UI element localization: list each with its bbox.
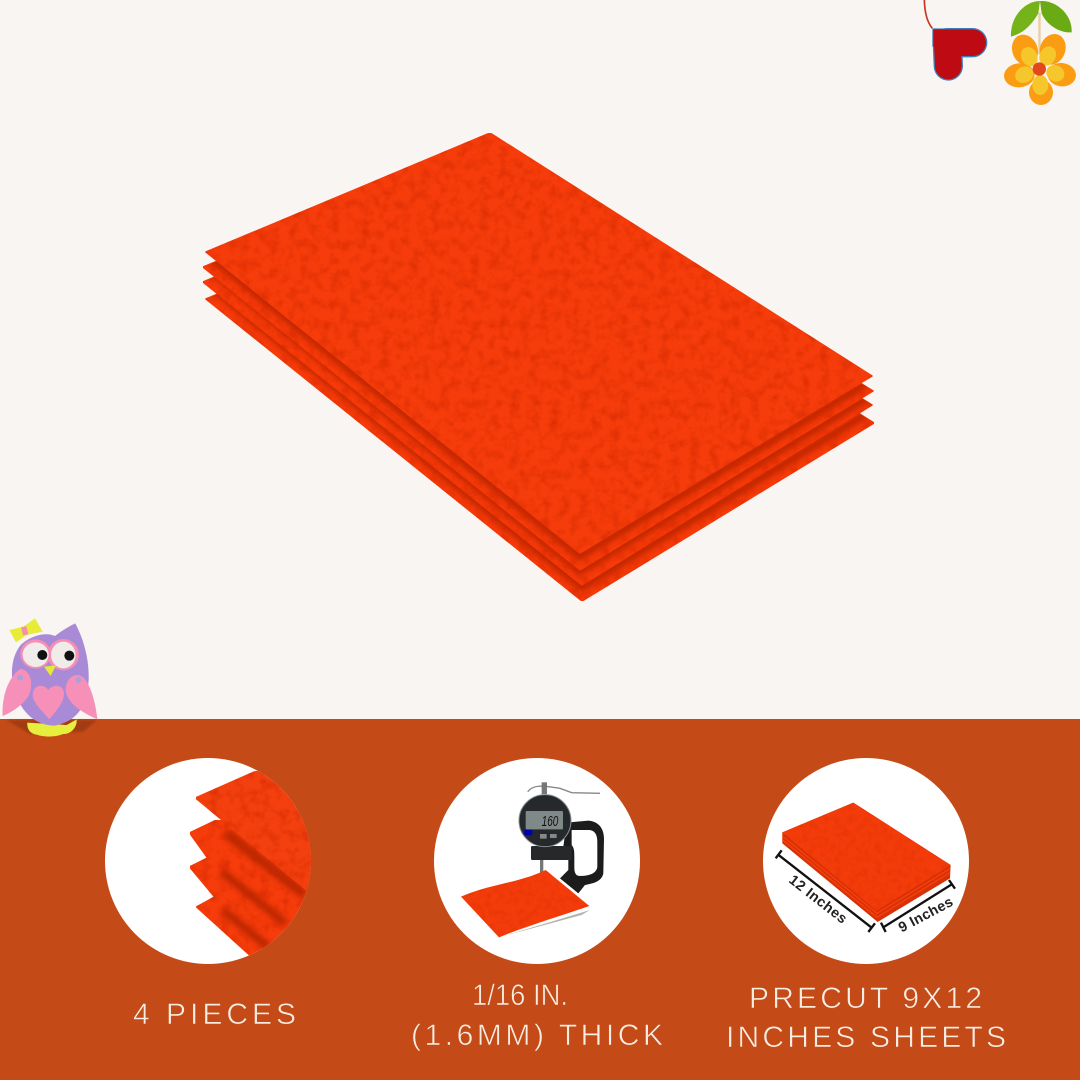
circle 2: thickness gauge (434, 758, 640, 964)
circle 3: sheet size diagram: 12 Inches (786, 872, 850, 927)
gauge dial (519, 795, 571, 847)
icon: yellow inner petals (1012, 44, 1067, 95)
dimension: 12 inches (776, 850, 875, 932)
caption: thickness: 1/16 IN. (472, 979, 568, 1012)
owl shadow (7, 720, 97, 734)
owl beak (44, 665, 56, 676)
owl wings (3, 669, 31, 716)
circle 3: sheet size diagram: 9 Inches (896, 894, 956, 936)
sheet 4 (205, 294, 874, 601)
bottom panel (0, 719, 1080, 1080)
owl heart (33, 686, 64, 719)
icon: button (1033, 62, 1046, 76)
icon: orange petals (1003, 30, 1077, 105)
felt sample sheet (461, 870, 589, 937)
gauge reading: 160 (542, 814, 559, 830)
owl eyes (20, 639, 51, 669)
icon: red felt heart ornament (924, 0, 973, 66)
circle 1: four pieces close-up (105, 758, 311, 964)
caption: 4 pieces: 4 PIECES (133, 998, 296, 1031)
icon: green leaves (1011, 1, 1040, 37)
gauge shadow (502, 910, 590, 937)
dimension: 9 inches (881, 880, 955, 932)
caption: thickness (411, 979, 663, 1052)
owl feet (27, 719, 77, 737)
caption: precut size (726, 982, 1006, 1054)
owl bow (9, 618, 43, 642)
gauge lever (528, 786, 600, 793)
sheet 2 (203, 260, 874, 571)
caption: precut size: PRECUT 9X12 (749, 982, 982, 1015)
sheet 3 (203, 276, 873, 586)
owl body (12, 623, 89, 726)
caption: precut size: INCHES SHEETS (726, 1021, 1006, 1054)
small felt stack (782, 803, 951, 922)
main product: stack of four felt sheets (203, 133, 874, 601)
caption: thickness: (1.6MM) THICK (411, 1019, 663, 1052)
top sheet (206, 133, 872, 553)
icon: felt owl (3, 618, 97, 737)
circle 3: sheet size diagram (763, 758, 969, 964)
icon: orange felt flower with green leaves (1003, 1, 1077, 105)
gauge frame (560, 821, 604, 893)
